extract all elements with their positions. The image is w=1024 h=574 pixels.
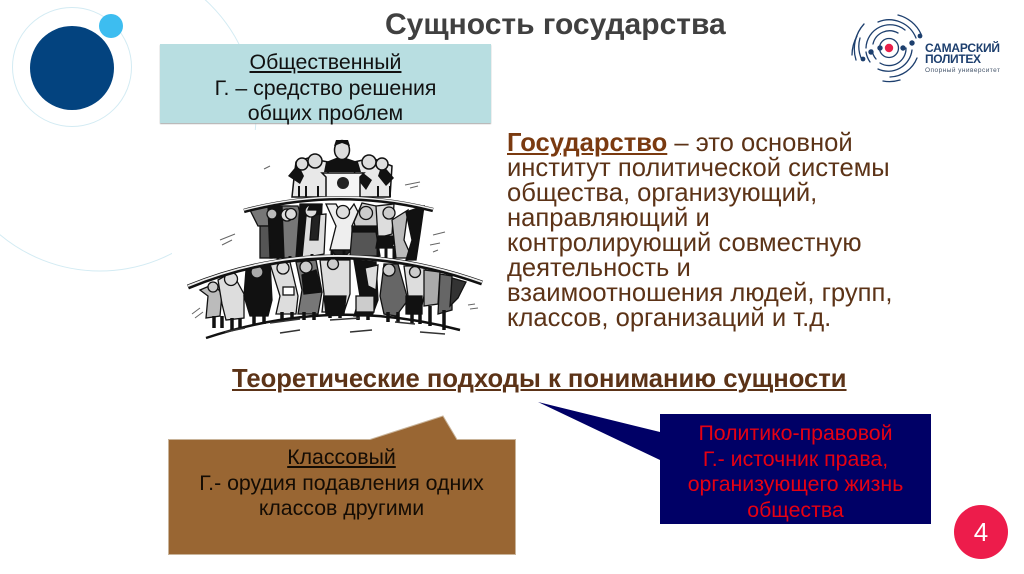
class approach text: классов другими: [259, 496, 424, 520]
logo: ПОЛИТЕХ: [925, 52, 981, 66]
middle tier slab: [244, 198, 433, 211]
logo: Опорный университет: [925, 66, 1000, 74]
illustration: state pyramid of people: [172, 130, 483, 340]
logo: САМАРСКИЙ: [925, 40, 1000, 55]
ground: [206, 315, 460, 338]
motion strokes: [192, 166, 478, 318]
definition text: направляющий и: [507, 204, 710, 232]
definition text: деятельность и: [507, 254, 691, 282]
social approach text: Г. – средство решения: [215, 76, 436, 100]
social approach text: Общественный: [250, 50, 401, 74]
page number badge: 4: [974, 517, 988, 547]
top tier figures: [288, 140, 394, 198]
class approach text: Г.- орудия подавления одних: [199, 470, 484, 494]
middle tier figures: [250, 203, 424, 262]
definition text: взаимоотношения людей, групп,: [507, 279, 892, 307]
definition text: [507, 129, 892, 332]
panel: social approach: [160, 44, 491, 123]
title: Сущность государства: [385, 8, 726, 41]
panel: political-legal approach: [538, 402, 931, 524]
political-legal approach text: [688, 421, 903, 522]
page number badge: [954, 505, 1008, 559]
political-legal approach text: организующего жизнь: [688, 472, 903, 496]
lower tier slab: [188, 257, 482, 287]
definition text: Государство – это основной: [507, 129, 853, 157]
heading: theoretical approaches: Теоретические подходы к пониманию сущности: [232, 365, 847, 393]
political-legal approach text: Г.- источник права,: [703, 446, 888, 470]
class approach text: [199, 445, 484, 520]
definition text: контролирующий совместную: [507, 229, 862, 257]
social approach text: общих проблем: [248, 101, 403, 125]
political-legal approach text: Политико-правовой: [698, 421, 893, 445]
political-legal approach text: общества: [747, 498, 844, 522]
logo: [851, 14, 1000, 82]
definition text: общества, организующий,: [507, 179, 817, 207]
social approach text: [215, 50, 436, 125]
class approach text: Классовый: [287, 445, 396, 469]
panel: class approach: [168, 415, 516, 555]
decorative circles: [0, 0, 256, 272]
definition text: институт политической системы: [507, 154, 890, 182]
definition text: классов, организаций и т.д.: [507, 304, 831, 332]
lower tier figures: [200, 258, 466, 330]
